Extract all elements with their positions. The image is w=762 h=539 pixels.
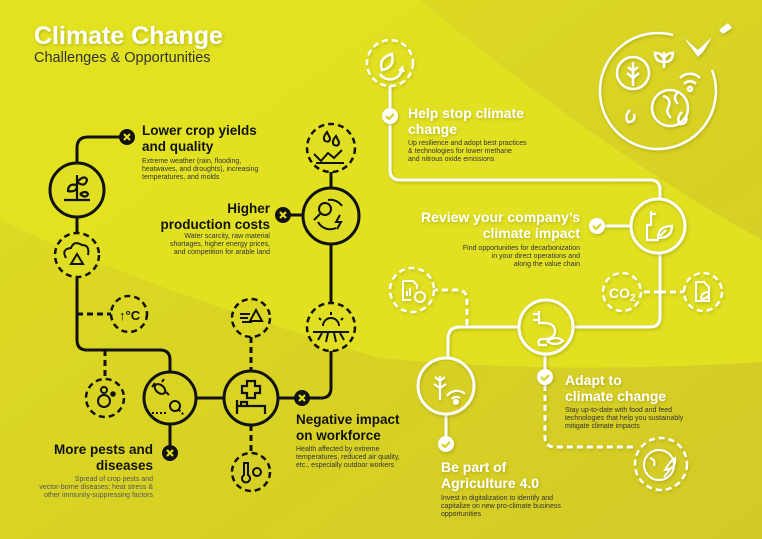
icon: production costs bbox=[303, 188, 359, 244]
icon: thermometer sun bbox=[232, 453, 270, 491]
text: more pests: vector-borne diseases; heat stress & bbox=[39, 484, 153, 491]
icon: check markers bbox=[382, 108, 605, 452]
black network lines bbox=[77, 137, 331, 453]
icon: temperature: ↑°C bbox=[119, 308, 141, 323]
text: higher production costs bbox=[160, 201, 271, 256]
text: agriculture 4.0: capitalize on new pro-climate business bbox=[441, 503, 561, 510]
text: review company: along the value chain bbox=[514, 261, 580, 268]
icon: leaf recycle bbox=[367, 40, 413, 86]
text: adapt: mitigate climate impacts bbox=[565, 423, 640, 430]
text: help stop climate change bbox=[408, 105, 527, 163]
icon: health bbox=[224, 371, 278, 425]
text: more pests: Spread of crop pests and bbox=[75, 476, 153, 483]
text: adapt: Adapt to bbox=[565, 372, 622, 388]
icon: cloud warning bbox=[55, 233, 99, 277]
text: negative impact: on workforce bbox=[296, 428, 381, 443]
icon: earth leaf bbox=[635, 438, 687, 490]
text: help stop climate change: and nitrous oxide emissions bbox=[408, 156, 495, 163]
text: review company: in your direct operations and bbox=[492, 253, 580, 260]
text: adapt: technologies that help you sustainably bbox=[565, 415, 684, 422]
icon: X markers bbox=[119, 129, 310, 461]
icon: CO2: CO bbox=[609, 285, 630, 301]
icon: pests bbox=[144, 372, 196, 424]
text: lower crop yields bbox=[142, 123, 258, 181]
text: lower crop yields: Extreme weather (rain, flooding, bbox=[142, 158, 241, 165]
white network lines bbox=[390, 86, 684, 447]
text: negative impact: etc., especially outdoor workers bbox=[296, 462, 395, 469]
text: higher production costs: shortages, higher energy prices, bbox=[170, 241, 270, 248]
text: higher production costs: production costs bbox=[160, 217, 270, 232]
icon: agriculture wifi bbox=[418, 358, 474, 414]
icon: CO2 bbox=[603, 273, 641, 311]
text: negative impact: Health affected by extreme bbox=[296, 446, 380, 453]
text: higher production costs: Higher bbox=[227, 201, 271, 216]
title bbox=[34, 22, 223, 66]
icon: temperature bbox=[111, 296, 147, 332]
text: agriculture 4.0: Agriculture 4.0 bbox=[441, 475, 539, 491]
text: more pests bbox=[39, 442, 153, 499]
text: help stop climate change: & technologies for lower methane bbox=[408, 148, 512, 155]
icon: wind warning bbox=[232, 299, 270, 337]
text: review company: Find opportunities for decarbonization bbox=[463, 245, 580, 252]
icon: document leaf bbox=[684, 273, 722, 311]
text: review company bbox=[421, 209, 580, 268]
text: negative impact: temperatures, reduced air quality, bbox=[296, 454, 400, 461]
icon: factory leaf bbox=[631, 199, 685, 253]
text: negative impact bbox=[296, 412, 400, 469]
text: review company: Review your company’s bbox=[421, 209, 580, 225]
icon: plug leaf bbox=[519, 300, 573, 354]
text: higher production costs: Water scarcity, raw material bbox=[184, 233, 270, 240]
text: lower crop yields: temperatures, and molds bbox=[142, 174, 220, 181]
text: adapt: climate change bbox=[565, 388, 666, 404]
icon: water drops growth bbox=[307, 124, 355, 172]
text: agriculture 4.0: Invest in digitalization to identify and bbox=[441, 495, 553, 502]
text: review company: climate impact bbox=[483, 225, 580, 241]
text: adapt: Stay up-to-date with food and feed bbox=[565, 407, 672, 414]
text: help stop climate change: Help stop climate bbox=[408, 105, 524, 121]
icon: lower crop yields bbox=[50, 163, 104, 217]
text: help stop climate change: Up resilience and adopt best practices bbox=[408, 140, 527, 147]
icon: virus bbox=[86, 379, 124, 417]
icon: big globe agriculture bbox=[600, 23, 732, 149]
icon: CO2: 2 bbox=[630, 293, 636, 304]
text: lower crop yields: Lower crop yields bbox=[142, 123, 257, 138]
title: Climate Change bbox=[34, 22, 223, 50]
text: agriculture 4.0 bbox=[441, 459, 561, 518]
text: agriculture 4.0: opportunities bbox=[441, 511, 482, 518]
text: negative impact: Negative impact bbox=[296, 412, 400, 427]
text: higher production costs: and competition for arable land bbox=[174, 249, 270, 256]
icon: document chart bbox=[390, 268, 434, 312]
icon: sun field bbox=[307, 303, 355, 351]
text: more pests: diseases bbox=[96, 458, 153, 473]
text: help stop climate change: change bbox=[408, 121, 457, 137]
text: more pests: other immunity-suppressing factors bbox=[44, 492, 153, 499]
title: Challenges & Opportunities bbox=[34, 50, 211, 66]
text: lower crop yields: and quality bbox=[142, 139, 214, 154]
text: agriculture 4.0: Be part of bbox=[441, 459, 507, 475]
text: adapt bbox=[565, 372, 684, 430]
text: more pests: More pests and bbox=[54, 442, 153, 457]
text: lower crop yields: heatwaves, and droughts), increasing bbox=[142, 166, 258, 173]
